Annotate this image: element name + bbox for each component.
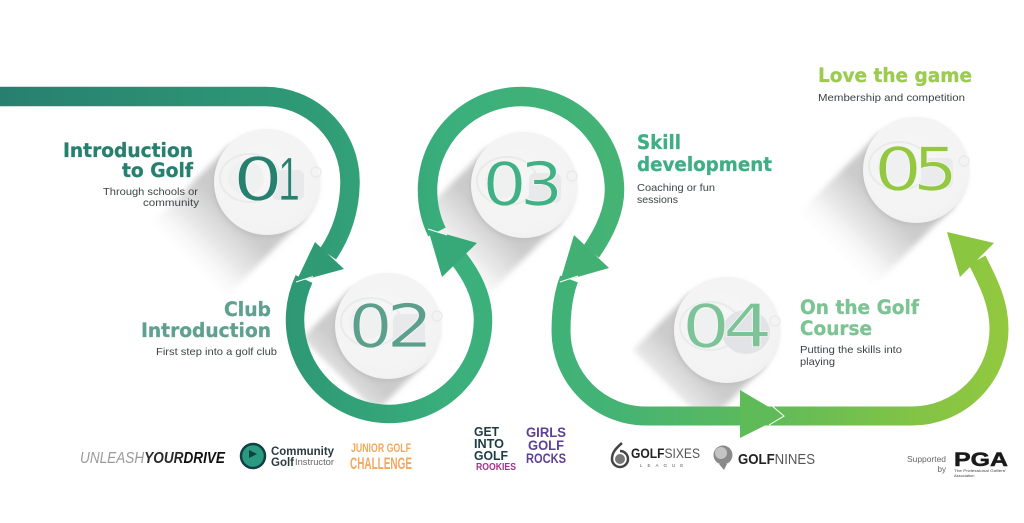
step 02 label — [141, 298, 277, 358]
number 05: 0 — [874, 135, 922, 205]
logo: Golf Nines: GOLFNINES — [738, 451, 815, 468]
step 04 label: playing — [800, 356, 835, 368]
long shadows behind discs — [145, 133, 953, 424]
logo: Get Into Golf Rookies: INTO — [474, 436, 504, 451]
number 01: 0 — [233, 145, 283, 215]
logo: Community Golf Instructor: Instructor — [295, 457, 334, 468]
step 03 label — [637, 131, 772, 206]
step 01 label — [63, 139, 200, 209]
logo: Unleash Your Drive: UNLEASHYOURDRIVE — [80, 450, 226, 467]
supported by PGA — [907, 450, 1008, 478]
step 02 label: Club — [224, 298, 271, 321]
step 04 label: Putting the skills into — [800, 344, 902, 356]
logo: Community Golf Instructor: Golf — [271, 455, 295, 469]
step 04 disc — [674, 277, 780, 383]
ribbon segment 3 — [428, 97, 614, 282]
logo: Community Golf Instructor — [241, 444, 334, 469]
supported by PGA: Association — [954, 473, 974, 478]
logo: Golf Nines — [714, 446, 815, 470]
ribbon segment 4 — [560, 276, 784, 438]
step 04 label: On the Golf — [800, 296, 919, 319]
step 03 disc — [471, 132, 577, 238]
step 05 disc — [863, 117, 969, 223]
supported by PGA: by — [938, 465, 946, 474]
ribbon segment 2 — [295, 229, 483, 414]
logo: Get Into Golf Rookies — [474, 424, 516, 473]
step 02 label: Introduction — [141, 319, 271, 342]
logo: Community Golf Instructor: Community — [271, 444, 334, 458]
number 03: 3 — [520, 150, 563, 220]
step 05 label: Membership and competition — [818, 92, 965, 104]
logo: Junior Golf Challenge: JUNIOR GOLF — [351, 441, 411, 455]
step 02 label: First step into a golf club — [156, 346, 277, 358]
logo: Junior Golf Challenge — [350, 441, 412, 473]
step 03 label: Skill — [637, 131, 681, 154]
logo: Get Into Golf Rookies: ROOKIES — [476, 462, 516, 473]
logo: Golf Sixes League — [612, 443, 700, 468]
logo: Girls Golf Rocks: ROCKS — [526, 451, 566, 466]
supported by PGA: Supported — [907, 455, 946, 464]
step 04 label: Course — [800, 317, 872, 340]
number 05: 5 — [913, 135, 958, 205]
step 01 label: to Golf — [122, 159, 193, 182]
ribbon segment 1 — [0, 96, 350, 282]
step 03 label: sessions — [637, 194, 678, 206]
logo: Get Into Golf Rookies: GOLF — [474, 448, 508, 463]
ribbon segment 5 — [765, 232, 999, 416]
step 04 label — [800, 296, 919, 368]
step 03 label: development — [637, 153, 772, 176]
logo: Girls Golf Rocks: GIRLS — [526, 425, 566, 440]
step 01 label: Introduction — [63, 139, 193, 162]
step 01 label: Through schools or — [103, 186, 199, 198]
step 05 label: Love the game — [818, 64, 972, 87]
step 01 disc — [214, 129, 321, 235]
logo: Golf Sixes League: LEAGUE — [640, 463, 688, 468]
number 01: 1 — [278, 145, 300, 213]
number 02: 2 — [386, 292, 434, 362]
step 05 label — [818, 64, 972, 104]
logo: Girls Golf Rocks — [526, 425, 566, 466]
logo: Get Into Golf Rookies: GET — [474, 424, 499, 439]
number 03: 0 — [482, 150, 526, 220]
number 04: 0 — [682, 292, 730, 362]
logo: Girls Golf Rocks: GOLF — [528, 438, 564, 453]
step 01 label: community — [143, 197, 200, 209]
step 03 label: Coaching or fun — [637, 182, 715, 194]
supported by PGA: PGA — [954, 450, 1008, 471]
number 04: 4 — [723, 292, 772, 362]
logo: Junior Golf Challenge: CHALLENGE — [350, 454, 412, 473]
number 02: 0 — [348, 292, 392, 362]
step 02 disc — [335, 273, 442, 379]
supported by PGA: The Professional Golfers' — [954, 468, 1006, 473]
logo: Golf Sixes League: GOLFSIXES — [631, 445, 700, 461]
